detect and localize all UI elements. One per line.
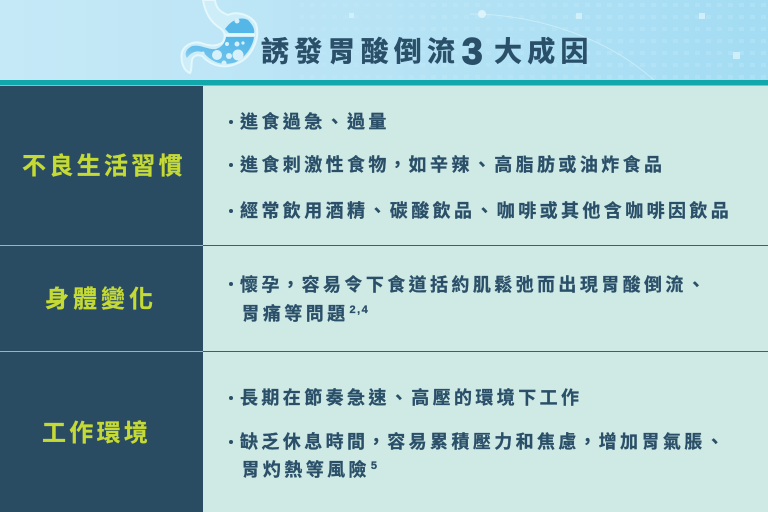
row label: 工作環境 bbox=[0, 352, 203, 512]
row label: 工作環境: 工作環境 bbox=[42, 420, 151, 447]
bubbles bbox=[202, 18, 245, 66]
divider bbox=[0, 351, 203, 352]
header banner bbox=[0, 0, 768, 86]
icon: stomach bbox=[180, 0, 258, 74]
title: 3 bbox=[462, 31, 483, 72]
title: 大成因 bbox=[494, 36, 594, 67]
stomach outline bbox=[181, 0, 257, 73]
upper acid area bbox=[225, 18, 254, 33]
bullet: rest: 缺乏休息時間，容易累積壓力和焦慮，增加胃氣脹、 bbox=[240, 432, 727, 452]
bullet: pregnancy: 胃痛等問題2,4 bbox=[242, 304, 369, 324]
title bbox=[261, 31, 594, 72]
row label: 不良生活習慣 bbox=[0, 86, 203, 245]
row label: 身體變化 bbox=[0, 246, 203, 351]
bullet: rest: 胃灼熱等風險5 bbox=[242, 460, 379, 480]
bullet: work stress: 長期在節奏急速、高壓的環境下工作 bbox=[240, 388, 582, 408]
lower acid area bbox=[186, 37, 254, 64]
bullet: drinks: 經常飲用酒精、碳酸飲品、咖啡或其他含咖啡因飲品 bbox=[240, 201, 732, 221]
bullet: eating: 進食過急、過量 bbox=[240, 112, 390, 132]
bullet: food: 進食刺激性食物，如辛辣、高脂肪或油炸食品 bbox=[240, 155, 665, 175]
title: 誘發胃酸倒流 bbox=[261, 36, 460, 67]
bullet: pregnancy bbox=[229, 274, 708, 324]
bullet: pregnancy: 懷孕，容易令下食道括約肌鬆弛而出現胃酸倒流、 bbox=[240, 275, 708, 295]
bullet: rest bbox=[229, 432, 727, 480]
divider bbox=[203, 351, 768, 352]
row label: 身體變化: 身體變化 bbox=[45, 286, 157, 313]
valve bbox=[224, 34, 255, 36]
row label: 不良生活習慣: 不良生活習慣 bbox=[22, 153, 186, 180]
divider bbox=[203, 245, 768, 246]
divider bbox=[0, 245, 203, 246]
